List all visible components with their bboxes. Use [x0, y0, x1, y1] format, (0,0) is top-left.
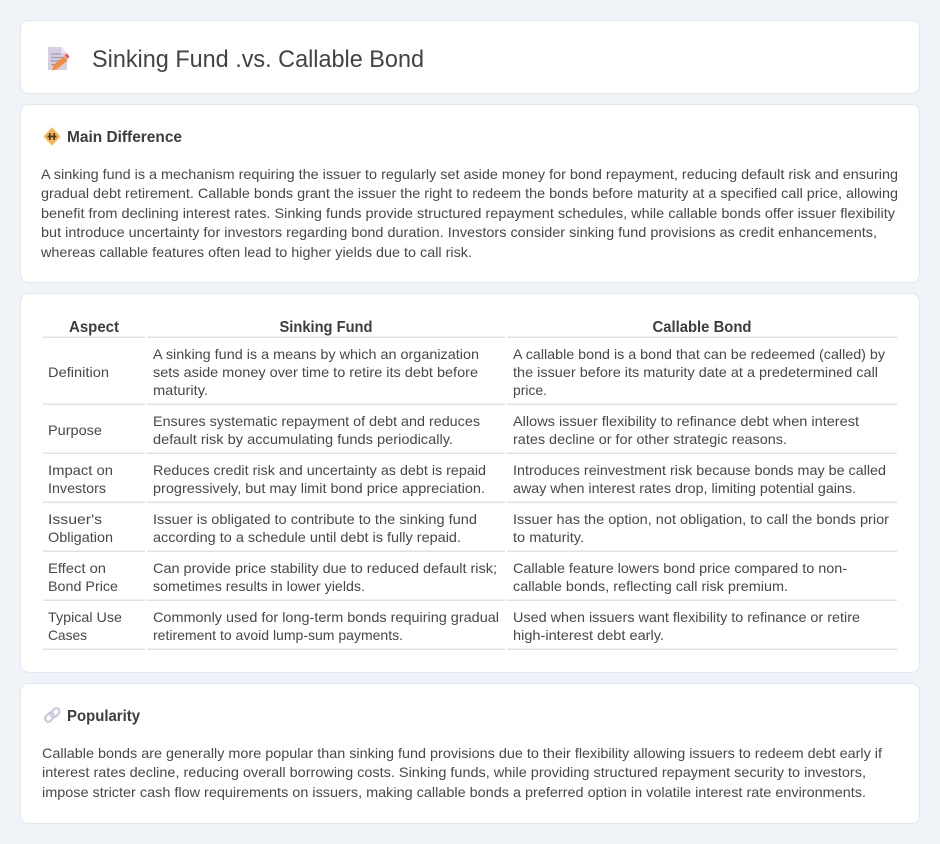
text block: main difference paragraph: A sinking fund is a mechanism requiring the issuer to regularly set aside money for bond repayment, reducing default risk and ensuring: [41, 166, 898, 182]
table row: purpose: [48, 413, 859, 447]
table row: definition: Definition: [48, 364, 109, 380]
table header row: Aspect: [69, 319, 120, 336]
panel: title header: [20, 20, 920, 94]
panel: popularity: [20, 684, 920, 824]
table row: effect on bond price: Can provide price stability due to reduced default risk;: [153, 560, 497, 576]
table row: impact on investors: Investors: [48, 480, 106, 496]
table row: typical use cases: retirement to avoid lump-sum payments.: [153, 627, 403, 643]
text block: popularity paragraph: Callable bonds are generally more popular than sinking fund provisions due to their flexibility allowing issuers to redeem debt early if: [42, 745, 882, 761]
table row: typical use cases: [48, 609, 860, 643]
text block: popularity paragraph: [42, 745, 882, 800]
table row: typical use cases: Used when issuers want flexibility to refinance or retire: [513, 609, 860, 625]
table row: definition: sets aside money over time to retire its debt before: [153, 364, 478, 380]
table row: definition: the issuer before its maturity date at a predetermined call: [513, 364, 878, 380]
table row: effect on bond price: sometimes results in lower yields.: [153, 578, 365, 594]
panel: main difference: [20, 104, 920, 282]
panel: comparison table: [20, 294, 920, 672]
table row: effect on bond price: Effect on: [48, 560, 106, 576]
icon: warning diamond: [44, 128, 60, 145]
table header row: Sinking Fund: [280, 319, 372, 336]
table row: typical use cases: Typical Use: [48, 609, 122, 625]
table row: purpose: Ensures systematic repayment of debt and reduces: [153, 413, 480, 429]
text block: popularity paragraph: interest rates decline, reducing overall borrowing costs. Sinking funds, while providing structured repayment security to investors,: [42, 764, 866, 780]
table row: definition: [48, 346, 885, 398]
table row: effect on bond price: Bond Price: [48, 578, 118, 594]
table row: definition: A sinking fund is a means by which an organization: [153, 346, 479, 362]
table row: definition: price.: [513, 382, 547, 398]
table row: impact on investors: progressively, but may limit bond price appreciation.: [153, 480, 485, 496]
table row: purpose: Allows issuer flexibility to refinance debt when interest: [513, 413, 859, 429]
table row: impact on investors: Introduces reinvestment risk because bonds may be called: [513, 462, 886, 478]
text block: main difference paragraph: whereas callable features often lead to higher yields due to call risk.: [40, 244, 472, 260]
table row: impact on investors: Reduces credit risk and uncertainty as debt is repaid: [153, 462, 486, 478]
text block: main difference paragraph: gradual debt retirement. Callable bonds grant the issuer the right to redeem the bonds before maturity at a specified call price, allowing: [41, 185, 898, 201]
table row: issuer's obligation: to maturity.: [513, 529, 584, 545]
title: Sinking Fund .vs. Callable Bond: [92, 46, 424, 73]
table row: issuer's obligation: according to a schedule until debt is fully repaid.: [153, 529, 461, 545]
heading: main difference: Main Difference: [67, 129, 182, 146]
table row: typical use cases: high-interest debt early.: [513, 627, 664, 643]
table row: purpose: Purpose: [48, 422, 102, 438]
table row: impact on investors: Impact on: [48, 462, 113, 478]
text block: main difference paragraph: benefit from declining interest rates. Sinking funds provide structured repayment schedules, while callable bonds offer issuer flexibility: [41, 205, 895, 221]
text block: main difference paragraph: [40, 166, 898, 260]
text block: main difference paragraph: but introduce uncertainty for investors regarding bond duration. Investors consider sinking fund provisions as credit enhancements,: [41, 224, 877, 240]
table row: issuer's obligation: Issuer has the option, not obligation, to call the bonds prior: [513, 511, 889, 527]
table row: issuer's obligation: Issuer's: [48, 511, 102, 527]
icon: chain link: [44, 707, 61, 723]
table row: purpose: rates decline or for other strategic reasons.: [513, 431, 787, 447]
table row: effect on bond price: callable bonds, reflecting call risk premium.: [513, 578, 788, 594]
table row: effect on bond price: Callable feature lowers bond price compared to non-: [513, 560, 847, 576]
icon: document with pencil: [48, 47, 70, 70]
table row: issuer's obligation: Issuer is obligated to contribute to the sinking fund: [153, 511, 477, 527]
table row: effect on bond price: [48, 560, 847, 594]
table header row: Callable Bond: [652, 319, 752, 336]
table row: issuer's obligation: [48, 511, 889, 545]
table row: impact on investors: away when interest rates drop, limiting potential gains.: [513, 480, 856, 496]
table header row: [69, 319, 752, 336]
table row: definition: maturity.: [153, 382, 208, 398]
table row: issuer's obligation: Obligation: [48, 529, 113, 545]
table row: typical use cases: Commonly used for long-term bonds requiring gradual: [153, 609, 499, 625]
table row: impact on investors: [48, 462, 886, 496]
text block: popularity paragraph: impose stricter cash flow requirements on issuers, making callable bonds a preferred option in volatile interest rate environments.: [42, 784, 866, 800]
table row: definition: A callable bond is a bond that can be redeemed (called) by: [513, 346, 885, 362]
heading: popularity: Popularity: [67, 708, 140, 725]
table row: typical use cases: Cases: [48, 627, 87, 643]
table row: purpose: default risk by accumulating funds periodically.: [153, 431, 453, 447]
